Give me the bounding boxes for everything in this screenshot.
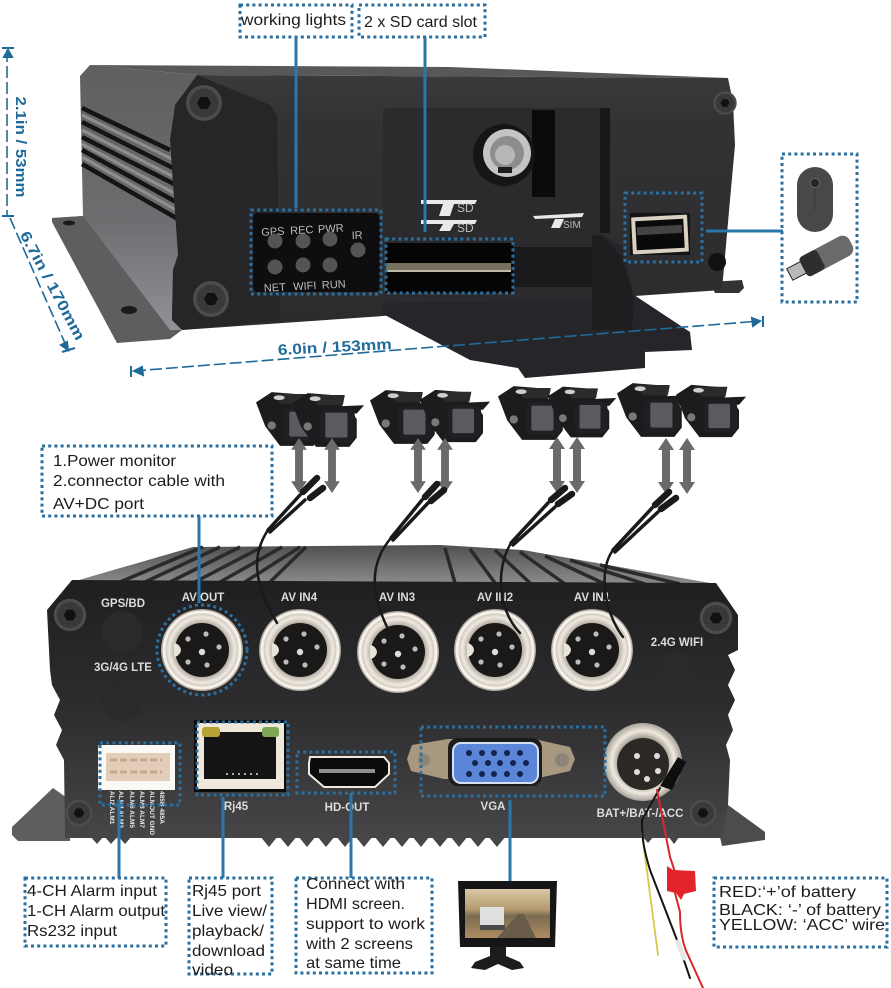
- double arrows between cameras and cables: [291, 437, 695, 494]
- callout: VGA to monitor: [421, 727, 605, 970]
- port labels: 3G/4G LTE: [94, 662, 152, 674]
- key slot: [532, 110, 555, 197]
- top surface: [72, 545, 716, 584]
- right flange: [715, 805, 765, 846]
- callout: wire colours: YELLOW: ‘ACC’ wire: [719, 917, 885, 934]
- callout: RJ45: download: [192, 943, 265, 960]
- dimension: width: 6.0in / 153mm: [277, 336, 392, 359]
- port labels: AV IN2: [477, 592, 513, 604]
- callout: RJ45: Rj45 port: [192, 883, 262, 900]
- port labels: GPS/BD: [101, 598, 145, 610]
- VGA port: [407, 738, 575, 786]
- port labels: 2.4G WIFI: [651, 637, 703, 649]
- LED indicator panel: PWR: [318, 223, 344, 236]
- SD and SIM card markings: SD: [457, 201, 474, 215]
- callout: RJ45: Live view/: [192, 903, 268, 920]
- callout: USB port peripherals: [625, 154, 857, 302]
- left flange: [12, 788, 70, 841]
- fold-out flap: [383, 235, 692, 378]
- flap hinge: [592, 235, 634, 330]
- dimension: height: [2, 48, 29, 216]
- port labels: AV OUT: [182, 592, 224, 604]
- callout: AV OUT connector cable: [42, 446, 272, 695]
- callout: wire colours: RED:‘+’of battery: [719, 884, 856, 901]
- SD and SIM card markings: SD: [457, 221, 474, 235]
- LED indicator panel: REC: [290, 224, 314, 237]
- SIM slot: [513, 247, 611, 287]
- icon: monitor: [458, 881, 557, 970]
- port labels: Rj45: [224, 801, 249, 813]
- alarm connector: ALM8 ALM7: [138, 791, 145, 828]
- corner plate: [170, 75, 280, 330]
- LED indicator panel: NET: [264, 282, 286, 295]
- top strip: [90, 65, 728, 78]
- alarm connector: [98, 745, 175, 835]
- port labels: BAT+/BAT-/ACC: [597, 808, 683, 820]
- callout: alarm input: 1-CH Alarm output: [27, 903, 166, 920]
- rear face: [47, 580, 738, 838]
- dimension: depth: 6.7in / 170mm: [16, 228, 88, 343]
- LED indicator panel: GPS: [261, 226, 285, 239]
- port labels: AV IN1: [574, 592, 611, 604]
- SD and SIM card markings: [421, 200, 584, 235]
- callout: HDMI: [296, 752, 432, 973]
- USB port: [630, 213, 690, 255]
- port labels: HD-OUT: [325, 802, 369, 814]
- SD and SIM card markings: SIM: [563, 220, 581, 231]
- callout: AV OUT connector cable: AV+DC port: [53, 496, 145, 513]
- callout: working lights: working lights: [240, 12, 346, 29]
- alarm connector: ALM6 ALM5: [128, 791, 135, 828]
- dimension: width: [131, 316, 763, 377]
- audio jack: [708, 253, 726, 271]
- LED indicator panel: [253, 213, 380, 295]
- top surface fins: [120, 547, 680, 584]
- port labels: VGA: [481, 801, 505, 813]
- dimension: depth: [10, 218, 88, 352]
- callout: RJ45: video: [192, 962, 233, 979]
- fuse holder: [667, 866, 696, 900]
- front face: [170, 75, 735, 330]
- callout: AV OUT connector cable: 1.Power monitor: [53, 453, 177, 470]
- alarm connector: ALI2 ALM1: [108, 791, 115, 825]
- power connector: [604, 723, 686, 801]
- LED indicator panel: IR: [351, 230, 363, 242]
- callout: HDMI: HDMI screen.: [306, 896, 405, 913]
- callout: HDMI: with 2 screens: [305, 936, 413, 953]
- port labels: [94, 592, 703, 820]
- RJ45 port: [194, 720, 286, 792]
- callout: HDMI: Connect with: [306, 876, 405, 893]
- alarm connector: ALMOUT GND: [148, 791, 155, 835]
- callout: alarm input: Rs232 input: [27, 923, 118, 940]
- callout: HDMI: at same time: [306, 955, 401, 972]
- callout: alarm input: 4-CH Alarm input: [27, 883, 158, 900]
- antenna caps: [101, 611, 697, 721]
- HDMI port: [309, 757, 389, 787]
- icon: mouse: [797, 167, 833, 232]
- alarm connector: 485B 485A: [158, 791, 165, 824]
- callout: RJ45: [189, 722, 288, 979]
- bottom device: DVR rear panel photo: [12, 545, 765, 847]
- callout: wire colours: BLACK: ‘-’ of battery: [719, 902, 881, 919]
- callout: wire colours: [714, 878, 887, 947]
- SD card slots: [386, 243, 513, 293]
- left side fins: [52, 65, 197, 343]
- right-hand panel stripe: [600, 108, 610, 233]
- four camera pairs: [256, 383, 746, 447]
- callout: working lights: [240, 5, 381, 294]
- aviation connectors: [161, 609, 633, 693]
- top device: DVR front panel photo: [52, 65, 744, 378]
- bottom teeth: [90, 836, 680, 847]
- callout: AV OUT connector cable: 2.connector cable with: [53, 473, 225, 490]
- callout: SD card slot: 2 x SD card slot: [364, 14, 478, 31]
- callout: RJ45: playback/: [192, 923, 265, 940]
- icon: USB flash drive: [785, 233, 856, 285]
- callout: SD card slot: [359, 5, 513, 293]
- screws on top device: [186, 85, 737, 317]
- callout: HDMI: support to work: [306, 916, 426, 933]
- wire sleeve: [678, 942, 684, 958]
- dimension: height: 2.1in / 53mm: [12, 96, 29, 198]
- inset lid panel: [383, 108, 609, 313]
- screws: [54, 599, 732, 826]
- LED indicator panel: WIFI: [293, 280, 317, 293]
- callout: alarm input: [25, 743, 180, 946]
- power wires with fuse: [642, 788, 703, 988]
- LED indicator panel: RUN: [322, 278, 346, 292]
- port labels: AV IN4: [281, 592, 318, 604]
- right mounting flange: [710, 280, 744, 293]
- port labels: AV IN3: [379, 592, 415, 604]
- alarm connector: ALM4 ALM3: [117, 791, 124, 828]
- camera Y-cables: [257, 478, 676, 637]
- lock: [473, 124, 535, 186]
